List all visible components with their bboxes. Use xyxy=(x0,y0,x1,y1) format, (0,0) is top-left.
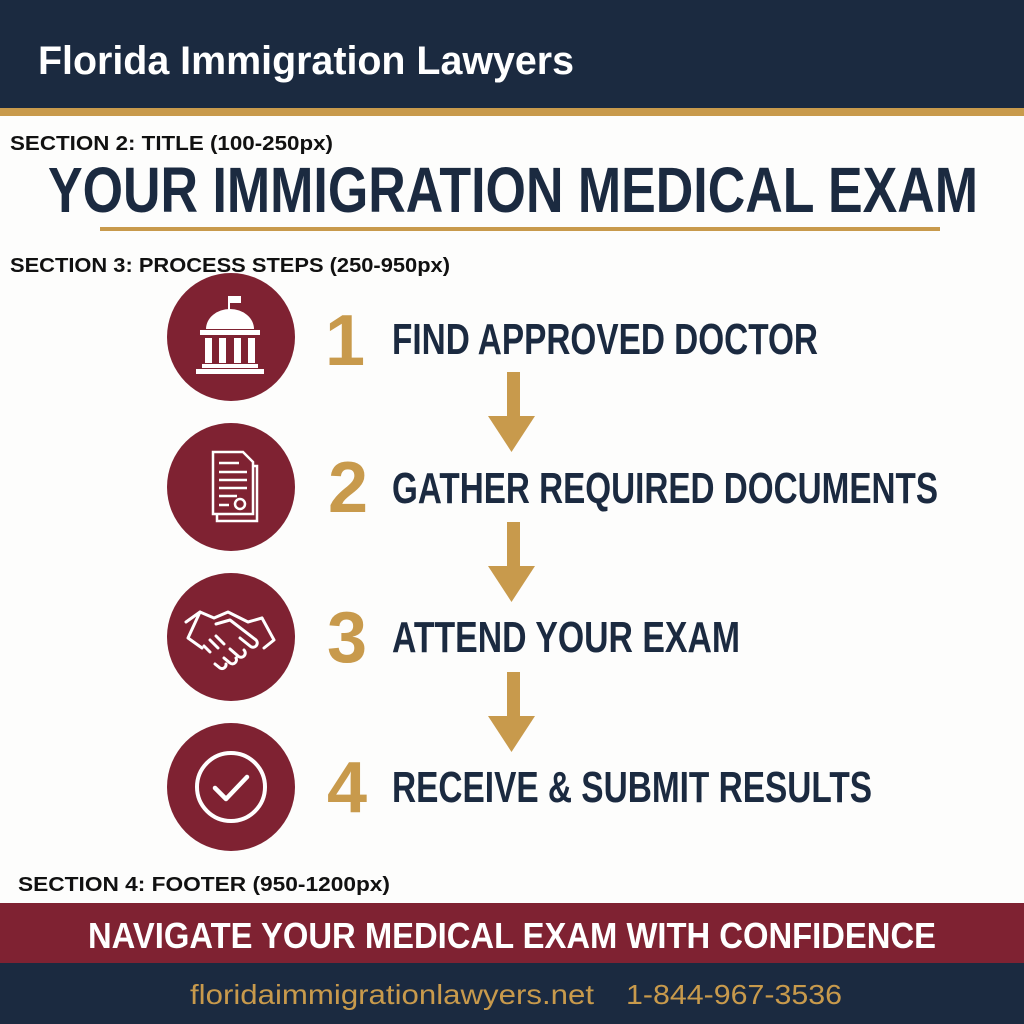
step 3 xyxy=(167,573,740,701)
footer banner: NAVIGATE YOUR MEDICAL EXAM WITH CONFIDENCE xyxy=(88,915,936,956)
section 3 label: SECTION 3: PROCESS STEPS (250-950px) xyxy=(10,255,450,277)
step text 1: FIND APPROVED DOCTOR xyxy=(392,315,818,364)
arrow 3 xyxy=(488,672,535,752)
header title: Florida Immigration Lawyers xyxy=(38,39,574,83)
step 4 xyxy=(167,723,872,851)
footer banner xyxy=(0,903,1024,963)
footer contact xyxy=(0,963,1024,1024)
step number 4: 4 xyxy=(327,748,367,828)
icon: check circle xyxy=(167,723,295,851)
section 4 label: SECTION 4: FOOTER (950-1200px) xyxy=(18,874,390,896)
step text 3: ATTEND YOUR EXAM xyxy=(392,613,740,662)
footer contact: floridaimmigrationlawyers.net xyxy=(190,979,594,1010)
step number 1: 1 xyxy=(325,301,365,381)
icon: government building xyxy=(167,273,295,401)
step 1 xyxy=(167,273,818,401)
header bar xyxy=(0,0,1024,116)
footer contact: 1-844-967-3536 xyxy=(626,979,842,1010)
step number 3: 3 xyxy=(327,598,367,678)
arrow 1 xyxy=(488,372,535,452)
section 2 label: SECTION 2: TITLE (100-250px) xyxy=(10,133,333,155)
step number 2: 2 xyxy=(328,448,368,528)
step text 4: RECEIVE & SUBMIT RESULTS xyxy=(392,763,872,812)
icon: documents xyxy=(167,423,295,551)
icon: handshake xyxy=(167,573,295,701)
arrow 2 xyxy=(488,522,535,602)
step 2 xyxy=(167,423,938,551)
